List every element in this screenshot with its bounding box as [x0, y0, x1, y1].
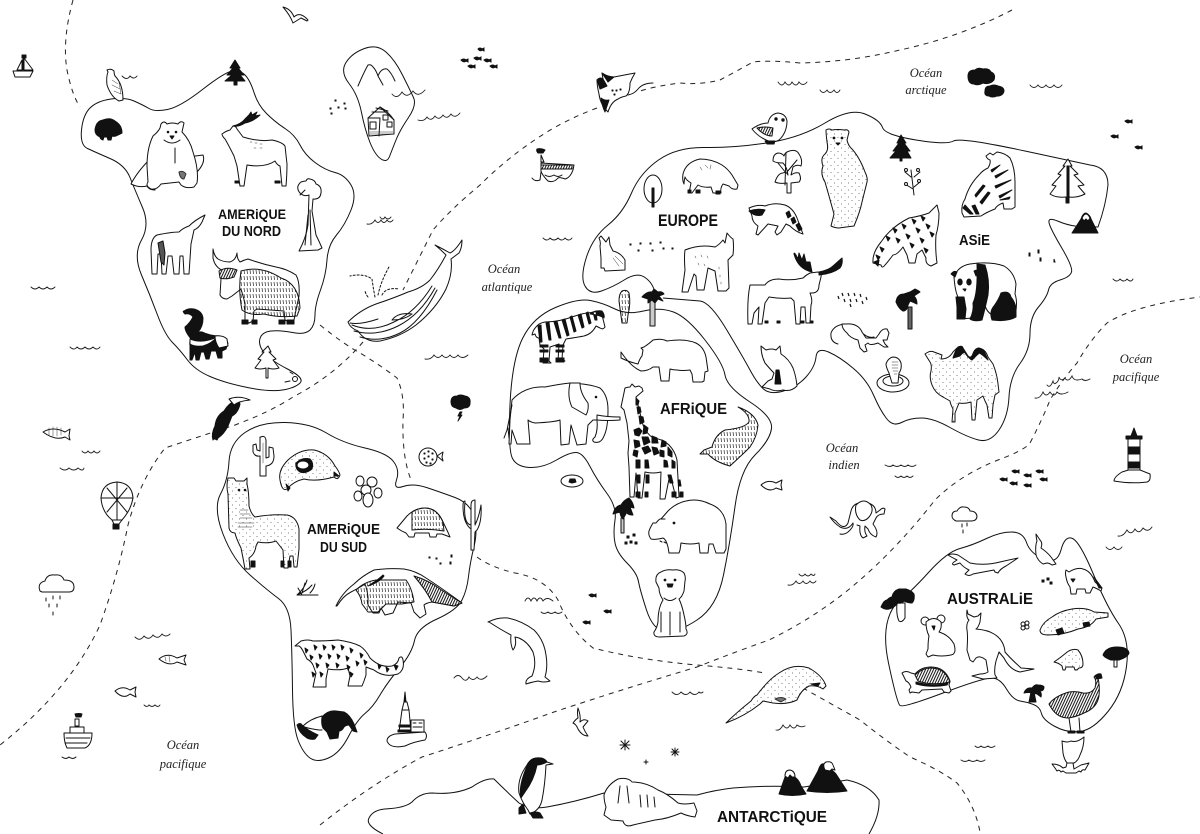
penguin	[519, 758, 553, 818]
continent: Amerique du Sud outline	[217, 422, 476, 760]
tuft	[297, 580, 318, 595]
giraffe	[621, 384, 683, 499]
tasmanian devil	[1066, 568, 1102, 594]
moose	[748, 253, 842, 324]
walrus	[604, 778, 697, 826]
label: Amerique du Sud: DU SUD	[320, 539, 367, 556]
continent: Afrique outline	[509, 300, 772, 632]
label: Ocean pacifique east: pacifique	[1112, 370, 1160, 384]
black tapir	[297, 711, 357, 739]
dots	[1042, 578, 1052, 584]
water lily	[561, 475, 583, 487]
baobab	[881, 589, 914, 622]
zebra	[532, 311, 605, 363]
lion	[654, 570, 687, 637]
acacia tree	[1103, 647, 1129, 667]
palm australia	[1024, 685, 1044, 702]
monkey	[831, 324, 889, 352]
palm top	[642, 289, 664, 326]
seagull small	[573, 708, 588, 736]
label: Ocean indien	[826, 441, 860, 472]
fish shoals	[461, 48, 1142, 624]
label: Ocean pacifique west: pacifique	[159, 757, 207, 771]
label: Amerique du Nord: DU NORD	[222, 223, 281, 240]
label: Antarctique: ANTARCTiQUE	[717, 809, 827, 826]
label: Europe: EUROPE	[658, 211, 718, 230]
fish	[159, 655, 186, 665]
continent: Eurasie outline	[583, 112, 1108, 441]
continent: Australie outline	[886, 532, 1127, 732]
manta ray	[597, 73, 653, 112]
label: Ocean pacifique east: Océan	[1120, 352, 1152, 366]
dots near Asia's coast	[1029, 250, 1055, 262]
continent: Groenland outline	[344, 47, 415, 161]
icon: black fir on the peak	[225, 60, 245, 85]
label: Ocean indien: indien	[828, 458, 860, 472]
water waves	[31, 76, 1152, 762]
label: Amerique du Sud	[307, 521, 380, 556]
fish	[761, 480, 782, 490]
icon: antarctic mountains	[779, 762, 847, 796]
dots	[429, 555, 452, 564]
desert cactus	[463, 500, 481, 550]
porcupine	[95, 119, 122, 140]
rabbit	[599, 236, 625, 271]
small fir tree on the peninsula	[255, 346, 298, 382]
rhino	[621, 339, 708, 382]
wild boar	[683, 159, 738, 194]
label: Ocean pacifique west	[159, 738, 207, 771]
label: Amerique du Nord	[218, 206, 286, 240]
elephant	[504, 383, 620, 445]
lynx	[682, 233, 734, 292]
cockatoo	[1036, 534, 1056, 565]
label: Ocean arctique: Océan	[910, 66, 942, 80]
label: Ocean indien: Océan	[826, 441, 858, 455]
icon: sailboat	[13, 55, 33, 77]
snow leopard	[873, 205, 939, 267]
striped fish	[43, 427, 70, 440]
label: Asie: ASiE	[959, 232, 990, 249]
icon: round tree	[644, 175, 662, 207]
panda	[951, 263, 1016, 321]
narwhal	[726, 666, 826, 723]
pufferfish	[419, 448, 443, 466]
label: Ocean pacifique west: Océan	[167, 738, 199, 752]
icon: hot air balloon	[101, 482, 133, 529]
small flower	[1021, 621, 1029, 630]
icon: sequoia tree	[298, 179, 322, 251]
Groenland mountains	[358, 65, 395, 86]
lighthouse on island	[1114, 428, 1150, 483]
kangaroo	[967, 610, 1034, 679]
giant anteater	[336, 569, 462, 618]
fish	[115, 687, 136, 697]
icon: Asia mountain	[1072, 213, 1098, 233]
label: Afrique: AFRiQUE	[660, 401, 727, 418]
standing bear	[822, 129, 867, 228]
raccoon	[749, 204, 803, 235]
fox	[761, 346, 797, 391]
label: Ocean atlantique	[482, 262, 533, 294]
dotted trail	[630, 242, 673, 251]
skunk	[183, 309, 228, 360]
prickly pear	[354, 476, 382, 507]
label: Ocean arctique: arctique	[905, 83, 947, 97]
steamship small	[62, 714, 92, 758]
koala	[921, 615, 955, 657]
fir tree	[1050, 159, 1085, 203]
icon: rain cloud	[952, 507, 977, 533]
steam ship	[532, 149, 574, 182]
palm africa	[613, 498, 634, 533]
cobra	[877, 357, 909, 392]
continent: Antarctique outline	[368, 779, 879, 834]
camel	[925, 346, 999, 422]
label: Ocean pacifique east	[1112, 352, 1160, 384]
crocodile	[700, 407, 758, 466]
dots	[838, 293, 867, 307]
continent: Amerique du Nord outline	[81, 71, 354, 391]
llama	[227, 478, 299, 569]
black clouds	[968, 68, 1004, 97]
emu	[1049, 674, 1102, 733]
label: Amerique du Nord: AMERiQUE	[218, 206, 286, 222]
label: Ocean arctique	[905, 66, 947, 97]
label: Amerique du Sud: AMERiQUE	[307, 521, 380, 538]
echidna	[1054, 649, 1083, 670]
dots	[625, 534, 637, 544]
sloth	[280, 450, 340, 491]
hippopotamus	[649, 500, 726, 553]
fir near Asia's coast	[890, 135, 911, 161]
label: Australie: AUSTRALiE	[947, 591, 1033, 608]
icon: Groenland house	[368, 107, 394, 136]
fan palm	[896, 289, 920, 329]
flower sprig	[904, 168, 920, 195]
label: Ocean atlantique: atlantique	[482, 280, 533, 294]
polar bear	[131, 122, 204, 190]
icon: seagull	[283, 7, 308, 23]
jaguar	[295, 640, 403, 687]
dots near Groenland	[330, 100, 346, 114]
plant shrub	[773, 150, 802, 193]
platypus	[1040, 608, 1108, 635]
yak	[213, 249, 300, 324]
saguaro cactus	[253, 436, 274, 476]
lighthouse with keeper's house	[387, 692, 426, 747]
dolphin	[488, 618, 550, 684]
howling wolf	[151, 215, 205, 274]
armadillo	[397, 508, 450, 537]
giant tortoise	[902, 667, 951, 693]
whale	[348, 240, 462, 341]
eagle	[107, 69, 123, 101]
icon: storm cloud	[451, 395, 470, 421]
stars	[620, 740, 679, 764]
toucan	[212, 397, 250, 440]
icon: rain cloud	[39, 575, 74, 615]
bat	[1052, 737, 1089, 773]
tiger	[962, 152, 1015, 217]
octopus	[830, 501, 885, 538]
parrot	[619, 290, 630, 323]
bearded dragon lizard	[948, 554, 1018, 576]
antlered deer	[222, 112, 287, 186]
label: Ocean atlantique: Océan	[488, 262, 520, 276]
snowy owl	[752, 113, 787, 144]
